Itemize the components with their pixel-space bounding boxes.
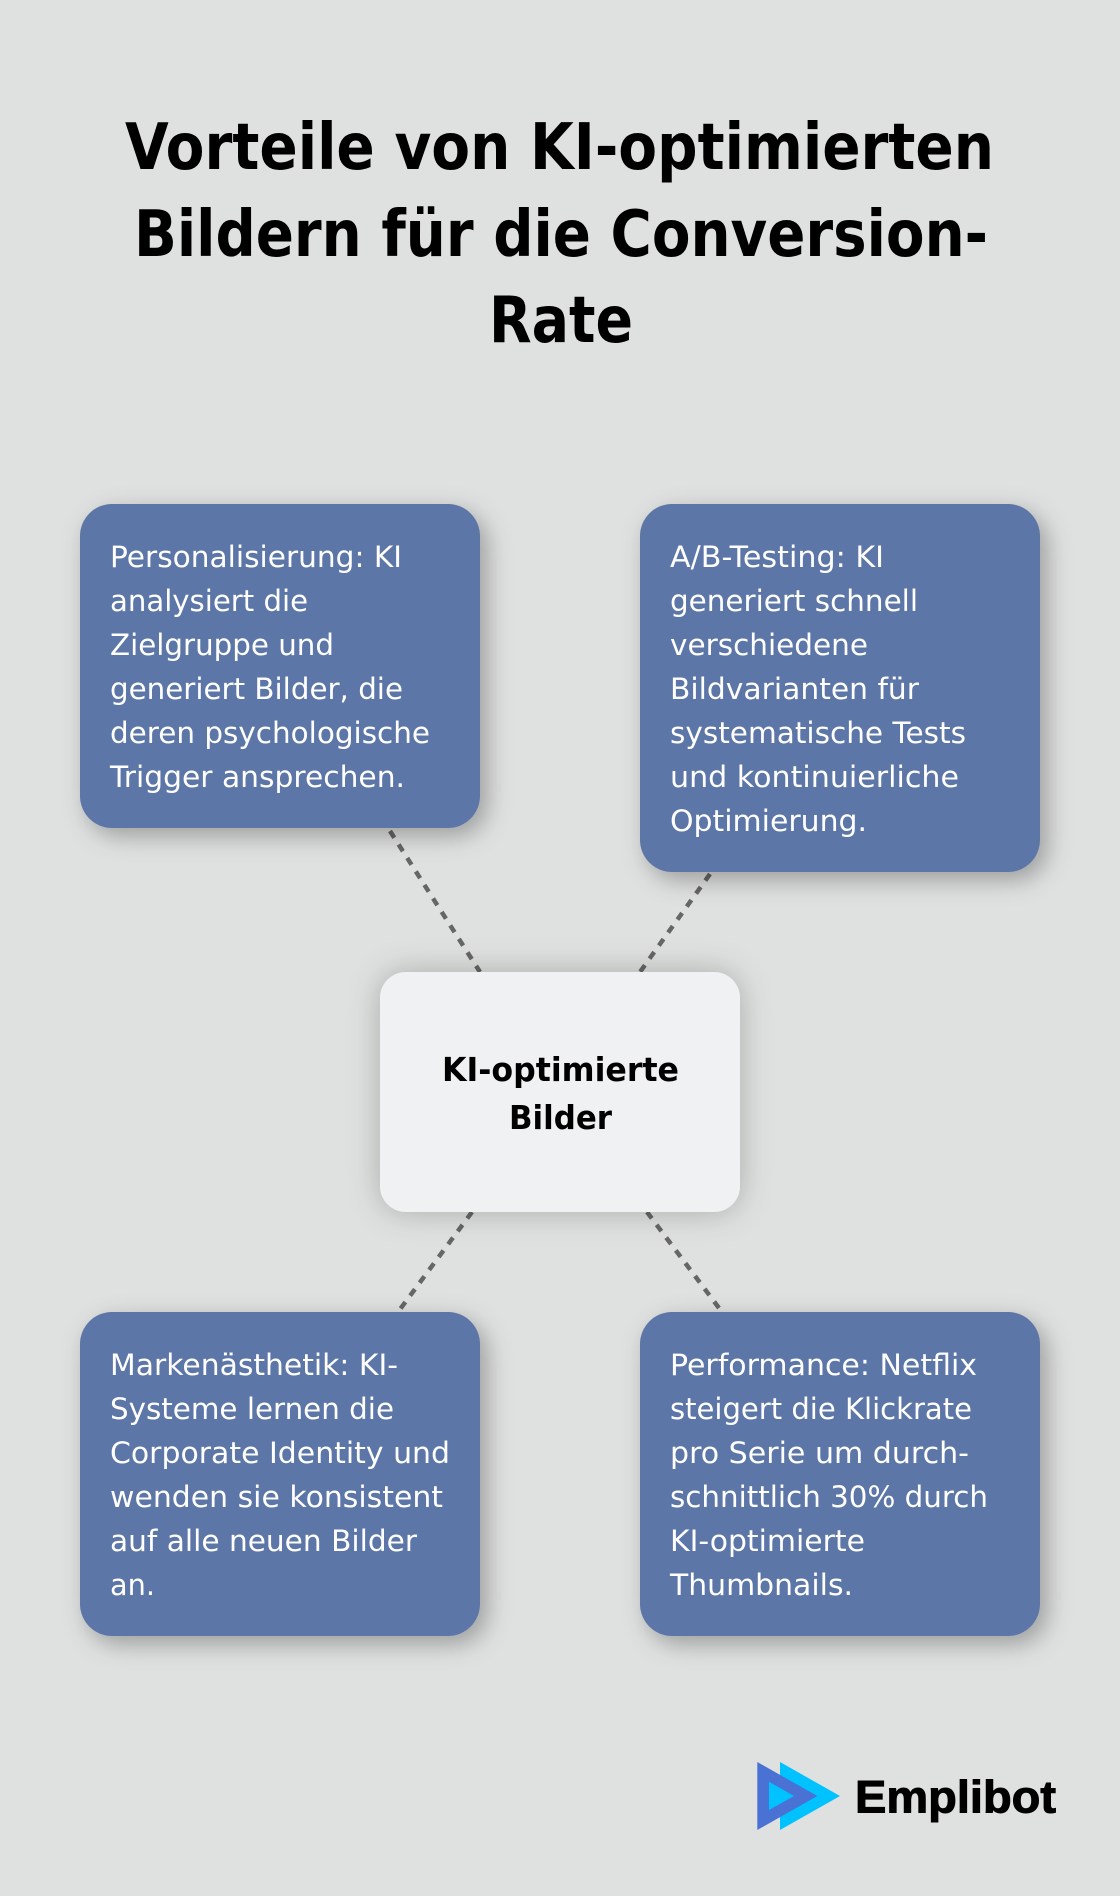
panel: A/B-Testing: systematische Tests	[670, 716, 966, 750]
panel: A/B-Testing: und kontinuierliche	[670, 760, 959, 794]
connector: Performance to center	[647, 1212, 722, 1312]
connector: A/B-Testing to center	[640, 874, 710, 972]
panel: Performance: Performance: Netflix	[670, 1348, 977, 1382]
title	[125, 111, 994, 358]
panel: Personalisierung: Trigger ansprechen.	[109, 760, 405, 794]
panel: A/B-Testing: A/B-Testing: KI	[670, 540, 884, 574]
panel: A/B-Testing: verschiedene	[670, 628, 868, 662]
panel: A/B-Testing: Bildvarianten für	[670, 672, 919, 706]
panel: center KI-optimierte Bilder: KI-optimierte	[442, 1050, 679, 1089]
panel: Personalisierung: generiert Bilder, die	[110, 672, 403, 706]
panel: center KI-optimierte Bilder	[380, 972, 740, 1212]
panel: Personalisierung: deren psychologische	[110, 716, 430, 750]
panel: Performance	[640, 1312, 1040, 1636]
panel: center KI-optimierte Bilder: Bilder	[509, 1098, 613, 1137]
title: Rate	[489, 284, 633, 358]
panel: A/B-Testing: generiert schnell	[670, 584, 918, 618]
title: Bildern für die Conversion-	[134, 198, 988, 272]
panel: Performance: Thumbnails.	[669, 1568, 853, 1602]
title: Vorteile von KI-optimierten	[125, 111, 994, 185]
panel: Personalisierung: Personalisierung: KI	[110, 540, 402, 574]
panel: Markenästhetik: an.	[110, 1568, 155, 1602]
panel: Performance: KI-optimierte	[670, 1524, 865, 1558]
panel: Markenästhetik: auf alle neuen Bilder	[110, 1524, 417, 1558]
panel: Performance: steigert die Klickrate	[670, 1392, 972, 1426]
panel: Personalisierung: analysiert die	[110, 584, 308, 618]
connector: Markenästhetik to center	[398, 1212, 472, 1312]
panel: Personalisierung: Zielgruppe und	[110, 628, 334, 662]
logo wordmark: Emplibot	[855, 1772, 1056, 1823]
panel: Markenästhetik: wenden sie konsistent	[110, 1480, 443, 1514]
panel: Markenästhetik: Markenästhetik: KI-	[110, 1348, 398, 1382]
panel: Performance: schnittlich 30% durch	[670, 1480, 988, 1514]
panel: Personalisierung	[80, 504, 480, 828]
panel: Performance: pro Serie um durch-	[670, 1436, 969, 1470]
panel: A/B-Testing	[640, 504, 1040, 872]
panel: Markenästhetik: Systeme lernen die	[110, 1392, 394, 1426]
icon: Emplibot logo	[757, 1762, 840, 1830]
panel: A/B-Testing: Optimierung.	[670, 804, 867, 838]
connector: Personalisierung to center	[390, 831, 480, 972]
panel: Markenästhetik: Corporate Identity und	[110, 1436, 450, 1470]
panel: Markenästhetik	[80, 1312, 480, 1636]
